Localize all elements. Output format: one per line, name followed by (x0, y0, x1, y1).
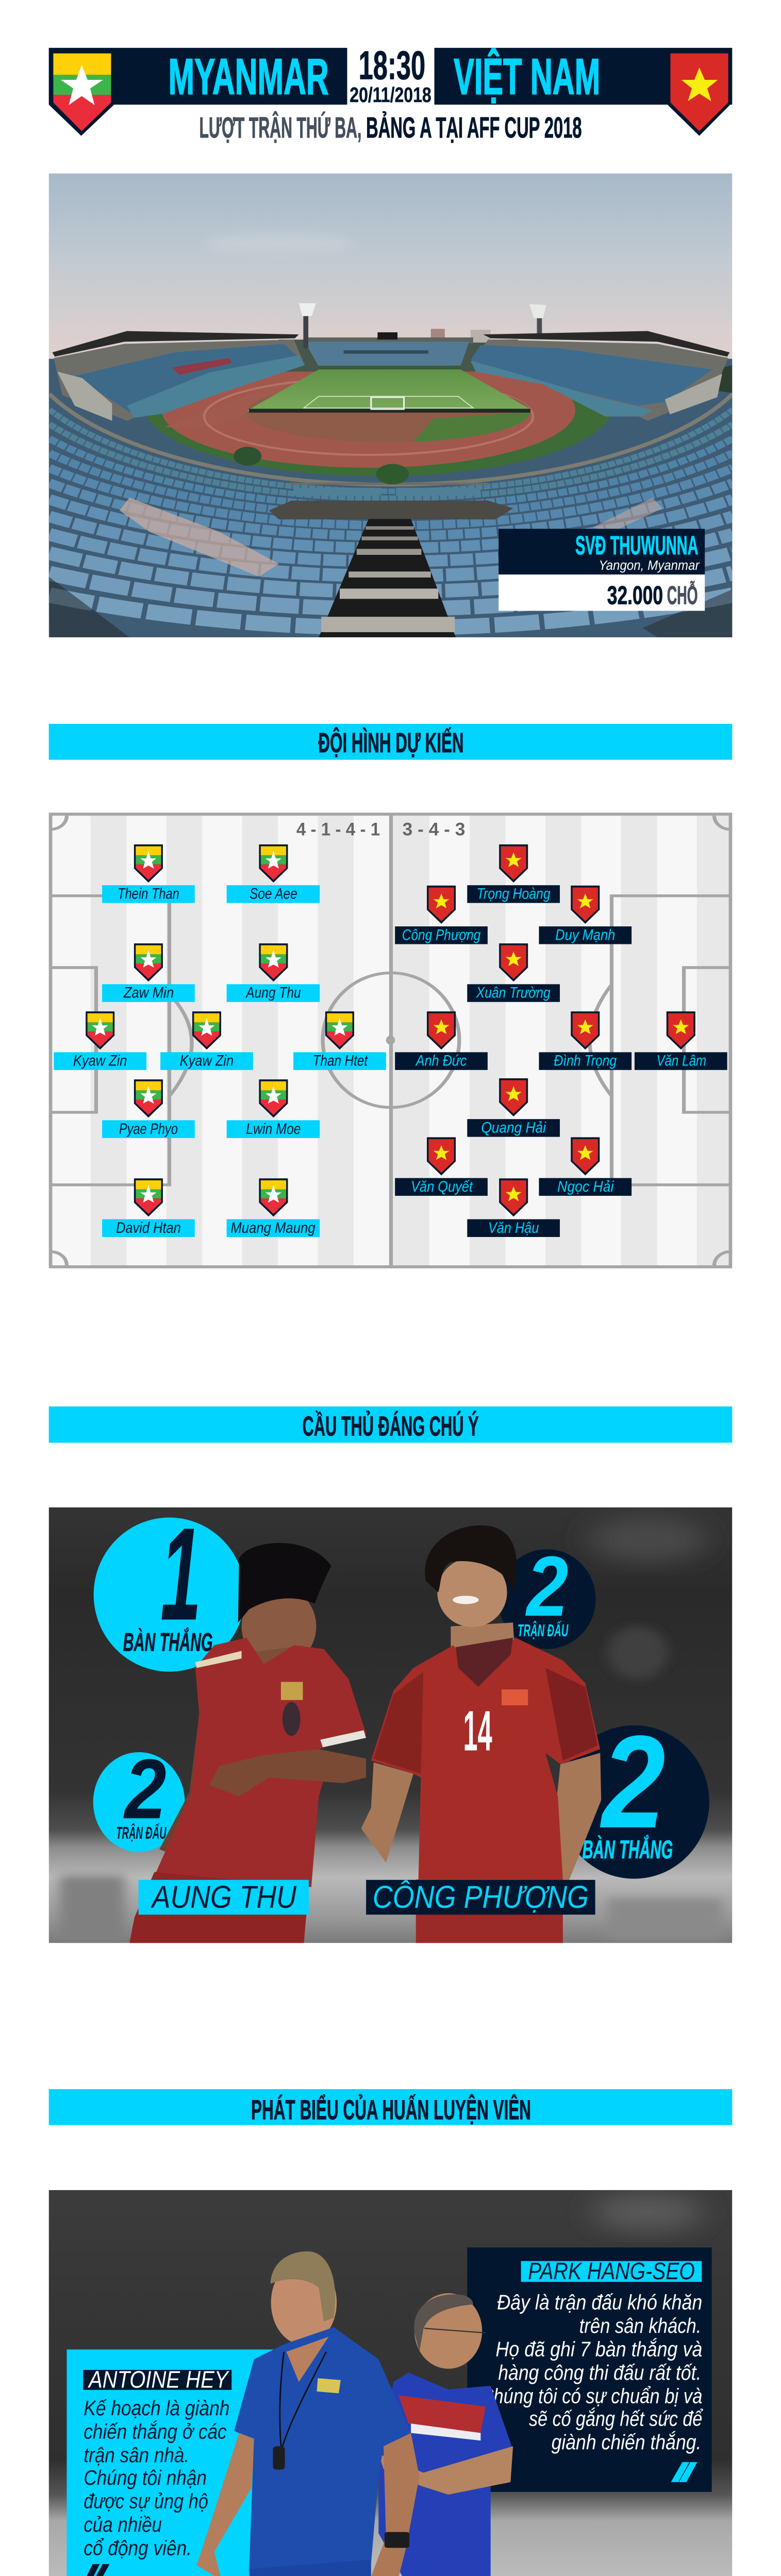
player: Xuân Trường (467, 943, 560, 1002)
formation labels (296, 819, 465, 839)
player: Aung Thu: Aung Thu (245, 984, 301, 1002)
player: Muang Maung (227, 1178, 320, 1237)
heading: coach statements (49, 2089, 732, 2126)
player: Duy Mạnh: Duy Mạnh (555, 926, 615, 943)
stat circle: Aung Thu goals: 1 (160, 1501, 201, 1648)
formation labels: 4 - 1 - 4 - 1 (296, 819, 380, 839)
player: Kyaw Zin left: Kyaw Zin (73, 1052, 127, 1070)
green ring and track (147, 397, 610, 476)
player: Văn Quyết (395, 1137, 488, 1196)
Vietnam team bar: VIỆT NAM (454, 48, 600, 105)
coach photo panel (49, 2190, 732, 2576)
match header (49, 42, 732, 144)
player photo panel (49, 1501, 732, 1943)
heading: key players: CẦU THỦ ĐÁNG CHÚ Ý (302, 1411, 479, 1442)
player: Đình Trọng: Đình Trọng (554, 1052, 617, 1070)
quote panel: Antoine Hey: được sự ủng hộ (84, 2489, 208, 2513)
player: Trọng Hoàng (467, 844, 560, 903)
player: Aung Thu (227, 943, 320, 1002)
section: predicted line-ups (49, 724, 732, 1268)
player: Đình Trọng (539, 1011, 632, 1070)
Myanmar players (54, 844, 386, 1237)
player: Văn Lâm (635, 1011, 727, 1070)
quote panel: Antoine Hey: chiến thắng ở các (84, 2420, 227, 2444)
heading: line-ups: ĐỘI HÌNH DỰ KIẾN (318, 727, 464, 758)
quote panel: Antoine Hey: ANTOINE HEY (88, 2366, 229, 2393)
player: Lwin Moe (227, 1079, 320, 1138)
player: Kyaw Zin left (54, 1011, 146, 1070)
name label: Công Phượng (366, 1880, 595, 1915)
player: Công Phượng: Công Phượng (402, 926, 481, 943)
player: Muang Maung: Muang Maung (230, 1219, 315, 1236)
player: Văn Lâm: Văn Lâm (656, 1052, 706, 1070)
player: Lwin Moe: Lwin Moe (246, 1120, 301, 1138)
player: Trọng Hoàng: Trọng Hoàng (477, 885, 551, 902)
player: Kyaw Zin centre: Kyaw Zin (180, 1052, 234, 1070)
player: Anh Đức: Anh Đức (415, 1052, 467, 1070)
stat circle: Công Phượng matches (500, 1549, 596, 1649)
central stairs (319, 519, 456, 637)
heading: key players (49, 1406, 732, 1443)
player: Quang Hải: Quang Hải (481, 1119, 546, 1136)
player: Than Htet: Than Htet (313, 1052, 368, 1070)
stat circle: Công Phượng matches: 2 (525, 1539, 568, 1634)
figure: Aung Thu (129, 1543, 366, 1943)
quote panel: Antoine Hey (67, 2349, 281, 2576)
trees (234, 447, 261, 466)
kickoff time and date (350, 42, 431, 107)
stadium info box: 32.000 (607, 581, 663, 609)
quote panel: Park Hang-seo: giành chiến thắng. (552, 2431, 701, 2454)
quote panel: Antoine Hey: Kế hoạch là giành (84, 2397, 229, 2420)
player: David Htan (102, 1178, 195, 1237)
concrete landing and railing (269, 501, 513, 519)
stat circle: Aung Thu matches: TRẬN ĐẤU (116, 1823, 167, 1843)
seating rows (732, 395, 733, 637)
player: Anh Đức (395, 1011, 488, 1070)
side stands (54, 340, 305, 421)
subtitle: LƯỢT TRẬN THỨ BA, (199, 111, 361, 144)
player: David Htan: David Htan (116, 1219, 181, 1236)
name label: Aung Thu: AUNG THU (151, 1880, 296, 1915)
quote panel: Park Hang-seo: PARK HANG-SEO (528, 2258, 695, 2284)
kickoff time and date: 20/11/2018 (350, 83, 431, 107)
stadium info box: Yangon, Myanmar (599, 558, 700, 573)
stat circle: Aung Thu goals: BÀN THẮNG (123, 1627, 213, 1657)
figure: Park Hang-seo (371, 2293, 513, 2576)
quote panel: Antoine Hey: cổ động viên. (84, 2536, 192, 2560)
stat circle: Aung Thu goals (94, 1518, 241, 1672)
stat circle: Công Phượng goals (570, 1725, 709, 1879)
section: match header and stadium (49, 42, 733, 637)
player: Văn Hậu (467, 1178, 560, 1237)
player: Thein Than: Thein Than (118, 885, 179, 902)
formation labels: 3 - 4 - 3 (403, 819, 465, 839)
player: Ngọc Hải (539, 1137, 632, 1196)
quote panel: Antoine Hey: Chúng tôi nhận (84, 2466, 207, 2489)
stat circle: Công Phượng matches: TRẬN ĐẤU (518, 1621, 569, 1640)
heading: line-ups (49, 724, 732, 760)
quote panel: Antoine Hey: trận sân nhà. (84, 2444, 189, 2467)
player: Than Htet (293, 1011, 386, 1070)
Myanmar team bar: MYANMAR (169, 48, 329, 105)
player: Kyaw Zin centre (160, 1011, 253, 1070)
quote panel: Park Hang-seo: trên sân khách. (579, 2314, 701, 2337)
player: Duy Mạnh (539, 886, 632, 944)
player: Công Phượng (395, 886, 488, 944)
football pitch (49, 812, 732, 1268)
stat circle: Công Phượng goals: BÀN THẮNG (582, 1835, 673, 1864)
quote panel: Park Hang-seo (467, 2247, 712, 2492)
Vietnam players (395, 844, 727, 1237)
player: Soe Aee (227, 844, 320, 903)
skyline and far stand (297, 335, 431, 340)
kickoff time and date: 18:30 (359, 42, 425, 88)
stat circle: Aung Thu matches: 2 (123, 1741, 167, 1836)
section: key players (49, 1406, 732, 1943)
player: Thein Than (102, 844, 195, 903)
player: Ngọc Hải: Ngọc Hải (557, 1178, 614, 1195)
player: Quang Hải (467, 1078, 560, 1137)
quote panel: Antoine Hey: của nhiều (84, 2513, 162, 2536)
player: Văn Hậu: Văn Hậu (488, 1219, 539, 1236)
stat circle: Công Phượng goals: 2 (600, 1708, 666, 1856)
player: Pyae Phyo: Pyae Phyo (119, 1120, 178, 1138)
player: Xuân Trường: Xuân Trường (476, 984, 551, 1002)
Vietnam team bar (435, 48, 732, 136)
name label: Aung Thu (139, 1880, 309, 1915)
stadium photo (49, 174, 733, 637)
figure: Công Phượng (361, 1526, 601, 1943)
section: coach statements (49, 2089, 732, 2576)
name label: Công Phượng: CÔNG PHƯỢNG (373, 1880, 589, 1915)
player: Pyae Phyo (102, 1079, 195, 1138)
Myanmar team bar (49, 48, 347, 136)
figure: Antoine Hey (197, 2251, 420, 2576)
stadium info box (498, 529, 705, 611)
player: Zaw Min: Zaw Min (123, 984, 174, 1002)
player: Soe Aee: Soe Aee (250, 885, 297, 902)
stadium info box: CHỖ (667, 581, 698, 609)
figure: Công Phượng: 14 (463, 1700, 492, 1762)
player: Văn Quyết: Văn Quyết (411, 1178, 473, 1195)
stat circle: Aung Thu matches (93, 1741, 185, 1852)
player: Zaw Min (102, 943, 195, 1002)
